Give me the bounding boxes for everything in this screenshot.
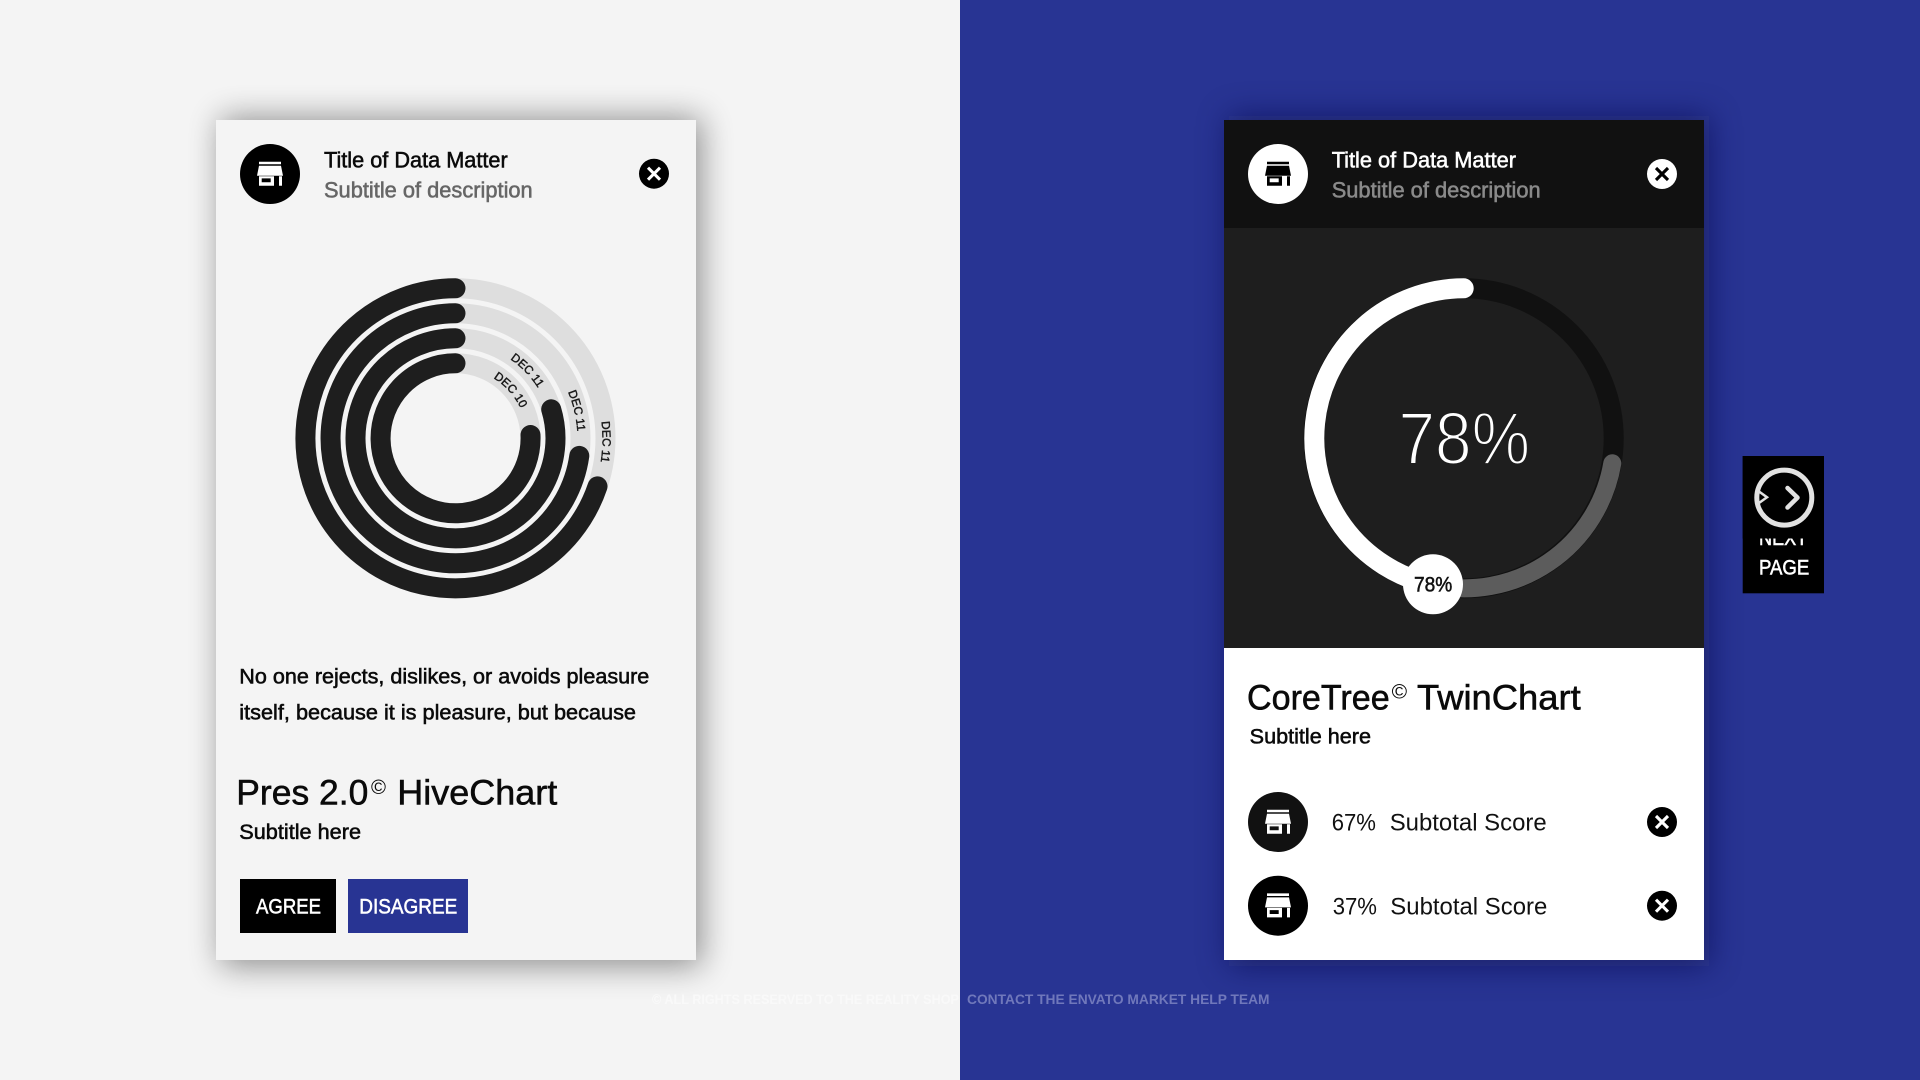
chart: concentric radial rings [295,278,616,598]
row label: Subtotal Score [1390,893,1547,920]
chart name heading [236,773,558,812]
ring labels [494,352,611,462]
header title: Title of Data Matter [324,147,508,172]
footer notice: © ALL RIGHTS RESERVED TO THE REALITY SHOP [652,991,959,1007]
row value: 67% [1332,810,1376,837]
header subtitle: Subtitle of description [324,177,533,202]
chart name heading [1247,678,1581,717]
card surface [216,120,696,960]
button: disagree: DISAGREE [359,895,457,918]
footer notice: CONTACT THE ENVATO MARKET HELP TEAM [967,991,1270,1007]
list row: 37% [1248,876,1677,936]
card shadow [221,118,701,966]
chart subtitle: Subtitle here [239,820,361,844]
ring labels: DEC 11 [600,422,611,462]
chart name heading: TwinChart [1417,678,1581,717]
icon: close [639,159,669,189]
card header band [1224,120,1704,228]
icon: store [1248,792,1308,852]
panel: TwinChart card [1224,116,1709,966]
ring tracks [306,288,606,588]
footer notice [652,991,1270,1007]
gauge badge: 78% [1414,574,1452,597]
button: agree [240,879,336,933]
ring labels: DEC 10 [494,372,527,408]
icon: arrow circle [1757,470,1812,525]
gauge badge [1403,554,1463,614]
panel: HiveChart card [200,97,722,987]
body text: itself, because it is pleasure, but because [239,701,636,724]
chart name heading: © [1392,682,1407,704]
gauge primary arc [1314,288,1464,585]
button: disagree [348,879,468,933]
button: agree: AGREE [256,895,321,918]
ring labels: DEC 11 [510,352,544,388]
icon: close [1647,891,1677,921]
ring values [305,288,598,588]
list area background [1224,648,1704,960]
icon: store [1248,876,1308,936]
header subtitle: Subtitle of description [1332,177,1541,202]
background: light half [0,0,960,1080]
chart name heading: © [371,777,386,799]
icon: store [1248,144,1308,204]
chart name heading: CoreTree [1247,678,1390,717]
gauge track [1314,288,1614,588]
chart area background [1224,228,1704,648]
list row: 67% [1248,792,1677,852]
chart subtitle: Subtitle here [1250,724,1371,748]
gauge secondary arc [1433,463,1612,588]
card shadow [1229,116,1709,966]
body text: No one rejects, dislikes, or avoids pleasure [239,665,649,688]
header title: Title of Data Matter [1332,147,1516,172]
row label: Subtotal Score [1390,810,1547,837]
gauge centre value: 78% [1398,397,1530,480]
icon: close [1647,159,1677,189]
background: blue half [960,0,1920,1080]
clipped label: next: NEXT [1759,527,1807,550]
icon: store [240,144,300,204]
ring labels: DEC 11 [568,390,586,431]
icon: close [1647,807,1677,837]
row value: 37% [1333,893,1377,920]
chart: radial gauge [1314,288,1614,614]
next page button [1743,456,1824,593]
chart name heading: HiveChart [397,773,558,812]
label: page: PAGE [1759,556,1809,579]
chart name heading: Pres 2.0 [236,773,368,812]
body text [239,665,649,724]
